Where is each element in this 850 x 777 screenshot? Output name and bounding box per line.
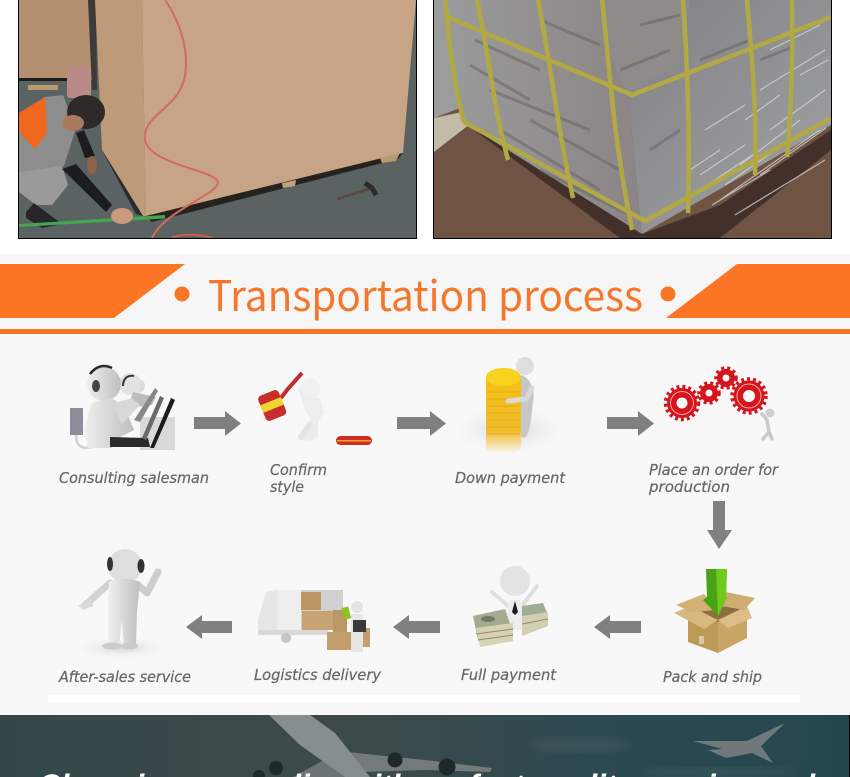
step 1: consulting salesman (59, 366, 209, 487)
icon: red gears with figure (666, 368, 774, 439)
label: Pack and ship (663, 668, 762, 686)
arrow (607, 411, 654, 436)
arrow (186, 615, 232, 639)
label: Logistics delivery (254, 666, 382, 684)
left orange banner (0, 264, 185, 318)
arrow (397, 411, 446, 436)
label: Consulting salesman (59, 469, 209, 487)
step 8: after-sales service (58, 549, 191, 686)
label: After-sales service (58, 668, 191, 686)
step 7: logistics delivery (254, 590, 382, 684)
icon: figure hugging a coin stack (448, 357, 572, 456)
step 4: place an order: production (648, 478, 730, 496)
step 4: place an order (648, 368, 779, 496)
arrow (393, 615, 440, 639)
step 2: confirm style (257, 373, 372, 496)
label: Place an order for (649, 461, 779, 479)
right bullet (660, 286, 676, 302)
step 5: pack and ship (663, 569, 762, 686)
icon: small airplane (693, 723, 785, 763)
label: Confirm (270, 461, 327, 479)
photo: pallet of stacked bricks wrapped and strapped (434, 0, 832, 238)
rule (0, 329, 850, 334)
right orange banner (666, 264, 850, 318)
label: Full payment (461, 666, 557, 684)
icon: figure sitting on stacks of dollars (473, 566, 548, 647)
icon: figure with headset (70, 549, 174, 660)
icon: large airplane (253, 715, 492, 777)
arrow (194, 411, 241, 436)
process panel (0, 334, 850, 715)
worker (19, 95, 76, 176)
arrow (594, 615, 641, 639)
banner: airplanes in the sky (0, 715, 850, 777)
icon: figure with red hammer (257, 373, 372, 445)
icon: delivery van with boxes and courier (258, 590, 370, 652)
title band (0, 254, 850, 334)
arrow (707, 501, 732, 549)
icon: call centre figures (70, 366, 175, 450)
left bullet (174, 286, 190, 302)
step 6: full payment (461, 566, 557, 684)
step 3: down payment (448, 357, 572, 487)
heading: Transportation process (208, 263, 643, 324)
step 2: confirm style: style (270, 478, 304, 496)
photo: worker strapping a cardboard crate (18, 0, 416, 238)
icon: cardboard box with green arrow (674, 569, 755, 653)
label: Down payment (455, 469, 566, 487)
